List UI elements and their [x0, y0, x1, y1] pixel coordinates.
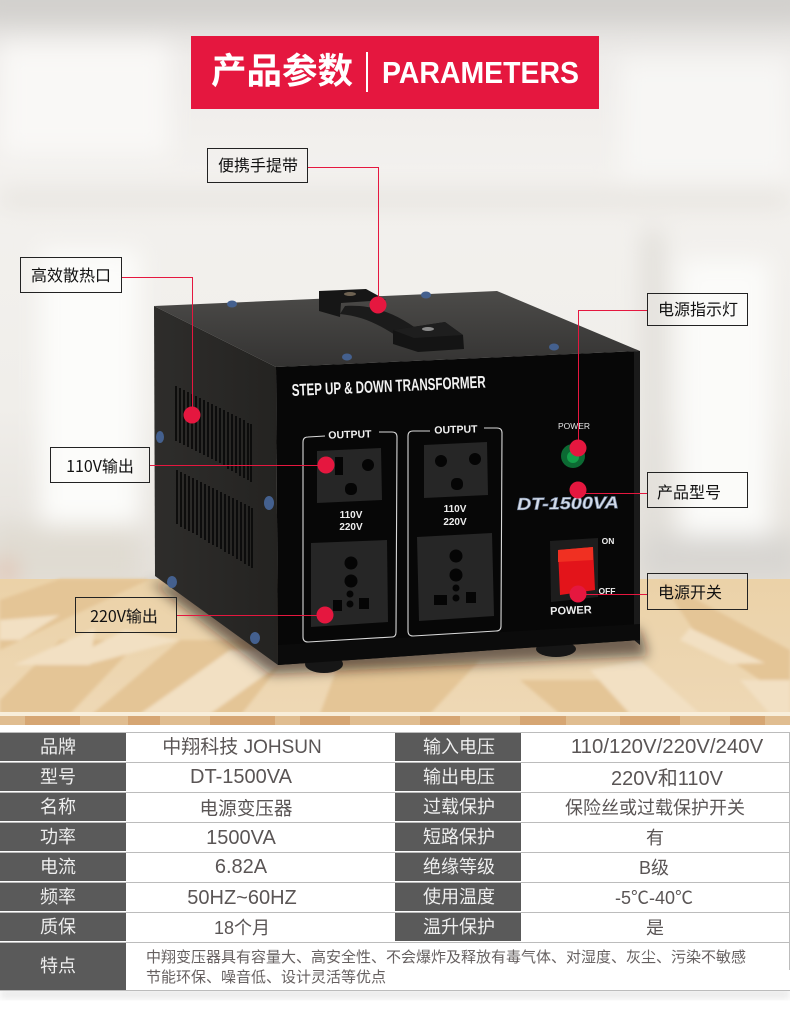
feet	[305, 655, 343, 673]
callout: 便携手提带: 便携手提带	[218, 152, 298, 176]
left column values: 电源变压器	[200, 798, 293, 819]
right column labels: 输出电压	[423, 763, 495, 789]
screws	[156, 292, 559, 644]
transformer product	[154, 289, 640, 673]
sockets	[311, 442, 494, 627]
socket voltage labels: 220V	[339, 522, 363, 533]
handle	[319, 289, 464, 352]
top panel	[154, 291, 640, 367]
left side panel	[154, 306, 278, 665]
callout: 220V输出	[76, 598, 334, 632]
features text	[146, 946, 746, 987]
parameter table	[0, 732, 790, 991]
left column values: DT-1500VA	[190, 766, 293, 788]
left column labels	[40, 733, 76, 978]
output frame right: OUTPUT	[434, 423, 478, 437]
callout: 110V输出: 110V输出	[66, 453, 134, 477]
right column values: 110/120V/220V/240V	[571, 736, 764, 758]
callout: 产品型号	[570, 472, 748, 508]
left column labels: 电流	[40, 853, 76, 879]
header cells	[0, 733, 521, 990]
product shadow on floor	[150, 582, 648, 674]
callout: 电源指示灯: 电源指示灯	[658, 296, 738, 320]
callout: 高效散热口	[20, 258, 200, 424]
callout: 220V输出: 220V输出	[90, 603, 158, 627]
right column labels	[423, 733, 495, 939]
callout: 110V输出	[50, 448, 334, 482]
heading on front panel: STEP UP & DOWN TRANSFORMER	[291, 373, 486, 400]
features text: 中翔变压器具有容量大、高安全性、不会爆炸及释放有毒气体、对湿度、灰尘、污染不敏感	[146, 946, 746, 967]
left column labels: 功率	[40, 823, 76, 849]
title banner: PARAMETERS	[382, 55, 579, 90]
right column labels: 短路保护	[423, 823, 495, 849]
power switch: OFF	[598, 586, 616, 596]
right column values: 有	[646, 828, 664, 848]
socket voltage labels: 110V	[340, 510, 363, 521]
callout: 电源开关: 电源开关	[658, 579, 722, 603]
right column values	[565, 736, 764, 938]
front panel	[276, 351, 640, 665]
right column labels: 绝缘等级	[423, 853, 495, 879]
table shadow	[0, 990, 790, 998]
output frame right	[408, 423, 502, 636]
left column labels: 品牌	[40, 733, 76, 759]
power switch: ON	[602, 536, 614, 546]
power switch: POWER	[550, 604, 592, 618]
right column labels: 输入电压	[423, 733, 495, 759]
output frame left: OUTPUT	[328, 428, 372, 442]
title banner	[191, 36, 599, 109]
right column values: 220V和110V	[611, 767, 724, 790]
left column labels: 质保	[40, 913, 76, 939]
row lines	[0, 732, 790, 990]
socket voltage labels: 220V	[443, 517, 467, 528]
left column values: 6.82A	[215, 856, 268, 878]
vent slots	[176, 386, 252, 568]
left column values: 18个月	[214, 918, 270, 938]
power switch	[550, 536, 616, 618]
model badge: DT-1500VA	[517, 493, 619, 514]
left column values	[162, 736, 322, 938]
power indicator: POWER	[558, 421, 590, 431]
background: blurred room and wood floor	[0, 0, 790, 725]
left column values: 1500VA	[206, 827, 277, 849]
right column values: 保险丝或过载保护开关	[565, 798, 745, 818]
right column labels: 使用温度	[423, 883, 495, 909]
right column values: -5℃-40℃	[615, 888, 693, 908]
socket voltage labels: 110V	[444, 504, 467, 515]
right column labels: 过载保护	[423, 793, 495, 819]
left column values: 50HZ~60HZ	[187, 887, 297, 909]
left column labels: 特点	[40, 952, 76, 978]
left column labels: 频率	[40, 883, 76, 909]
left column values: 中翔科技 JOHSUN	[162, 736, 322, 758]
callout: 电源指示灯	[570, 294, 748, 456]
power indicator	[558, 421, 590, 468]
socket voltage labels	[339, 504, 467, 533]
features text: 节能环保、噪音低、设计灵活等优点	[146, 966, 386, 987]
left column labels: 名称	[40, 793, 76, 819]
right column labels: 温升保护	[423, 913, 495, 939]
output frame left	[303, 428, 397, 642]
title banner: 产品参数	[211, 43, 353, 94]
right column values: 是	[646, 918, 664, 938]
callout: 电源开关	[570, 574, 748, 610]
left column labels: 型号	[40, 763, 76, 789]
callout: 便携手提带	[208, 148, 386, 314]
callout: 产品型号: 产品型号	[657, 479, 721, 503]
callout: 高效散热口: 高效散热口	[31, 262, 111, 286]
right column values: B级	[639, 858, 669, 878]
